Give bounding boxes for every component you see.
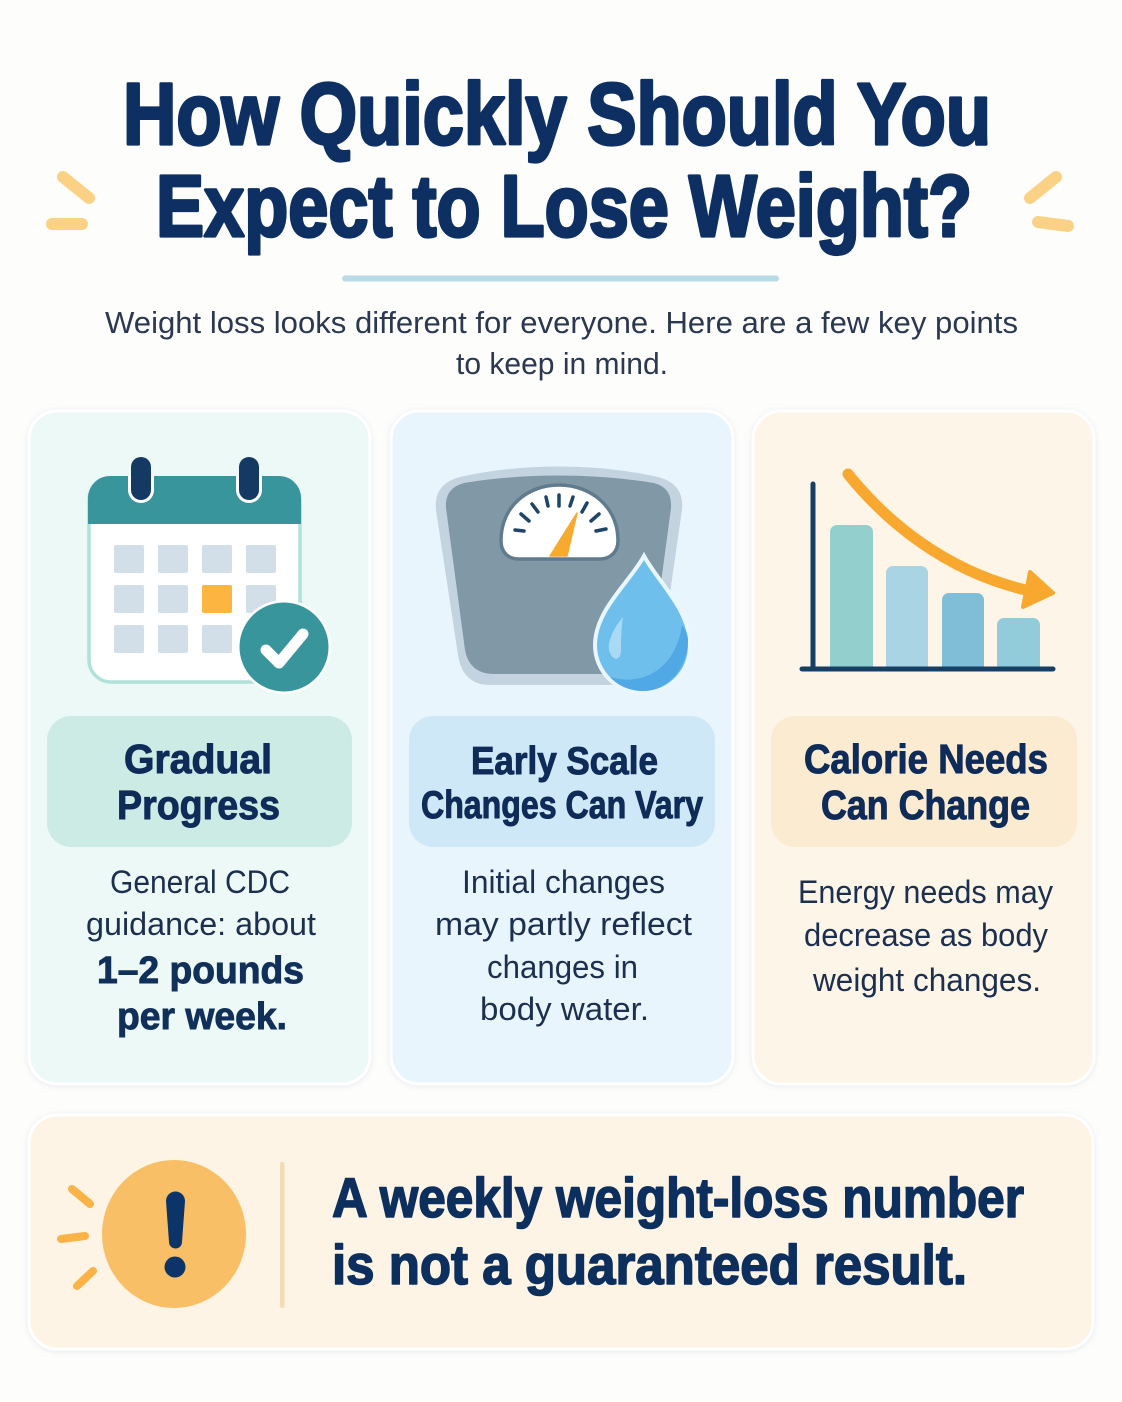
body text: General CDC (110, 864, 290, 900)
callout text: is not a guaranteed result. (332, 1233, 967, 1296)
heading pill: Changes Can Vary (421, 784, 703, 827)
body text: may partly reflect (435, 906, 692, 942)
left accent dashes (52, 177, 89, 224)
title: Expect to Lose Weight? (156, 158, 972, 255)
icon: calendar with check (88, 457, 331, 694)
body text (435, 864, 692, 1027)
body text: Initial changes (462, 864, 665, 900)
body text: body water. (480, 991, 649, 1027)
heading pill (409, 716, 715, 847)
panel: calorie needs (753, 411, 1094, 1084)
callout text: A weekly weight-loss number (332, 1166, 1024, 1229)
heading pill: Calorie Needs (804, 736, 1048, 782)
title: How Quickly Should You (123, 66, 991, 163)
title (123, 66, 991, 255)
heading pill: Early Scale (471, 740, 658, 783)
body text: 1–2 pounds (97, 950, 304, 992)
heading pill (47, 716, 352, 847)
right accent dashes (1030, 177, 1068, 226)
heading pill: Can Change (821, 782, 1030, 828)
body text (798, 874, 1053, 998)
body text: per week. (117, 996, 287, 1038)
panel: gradual progress (29, 411, 370, 1084)
panel: early scale changes (391, 411, 733, 1084)
heading pill: Progress (117, 782, 280, 828)
heading pill (771, 716, 1077, 847)
callout text (332, 1166, 1024, 1296)
chart: declining bars with arrow (802, 474, 1053, 669)
heading pill: Gradual (124, 736, 272, 782)
body text: guidance: about (86, 906, 316, 942)
subtitle: to keep in mind. (456, 346, 668, 381)
body text: changes in (487, 949, 638, 985)
icon: warning (61, 1160, 246, 1308)
body text: Energy needs may (798, 874, 1053, 910)
body text: weight changes. (812, 962, 1041, 998)
body text: decrease as body (804, 917, 1048, 953)
icon: scale with water drop (436, 466, 690, 693)
subtitle (105, 305, 1018, 381)
subtitle: Weight loss looks different for everyone. Here are a few key points (105, 305, 1018, 340)
callout (29, 1115, 1093, 1349)
body text (86, 864, 316, 1038)
